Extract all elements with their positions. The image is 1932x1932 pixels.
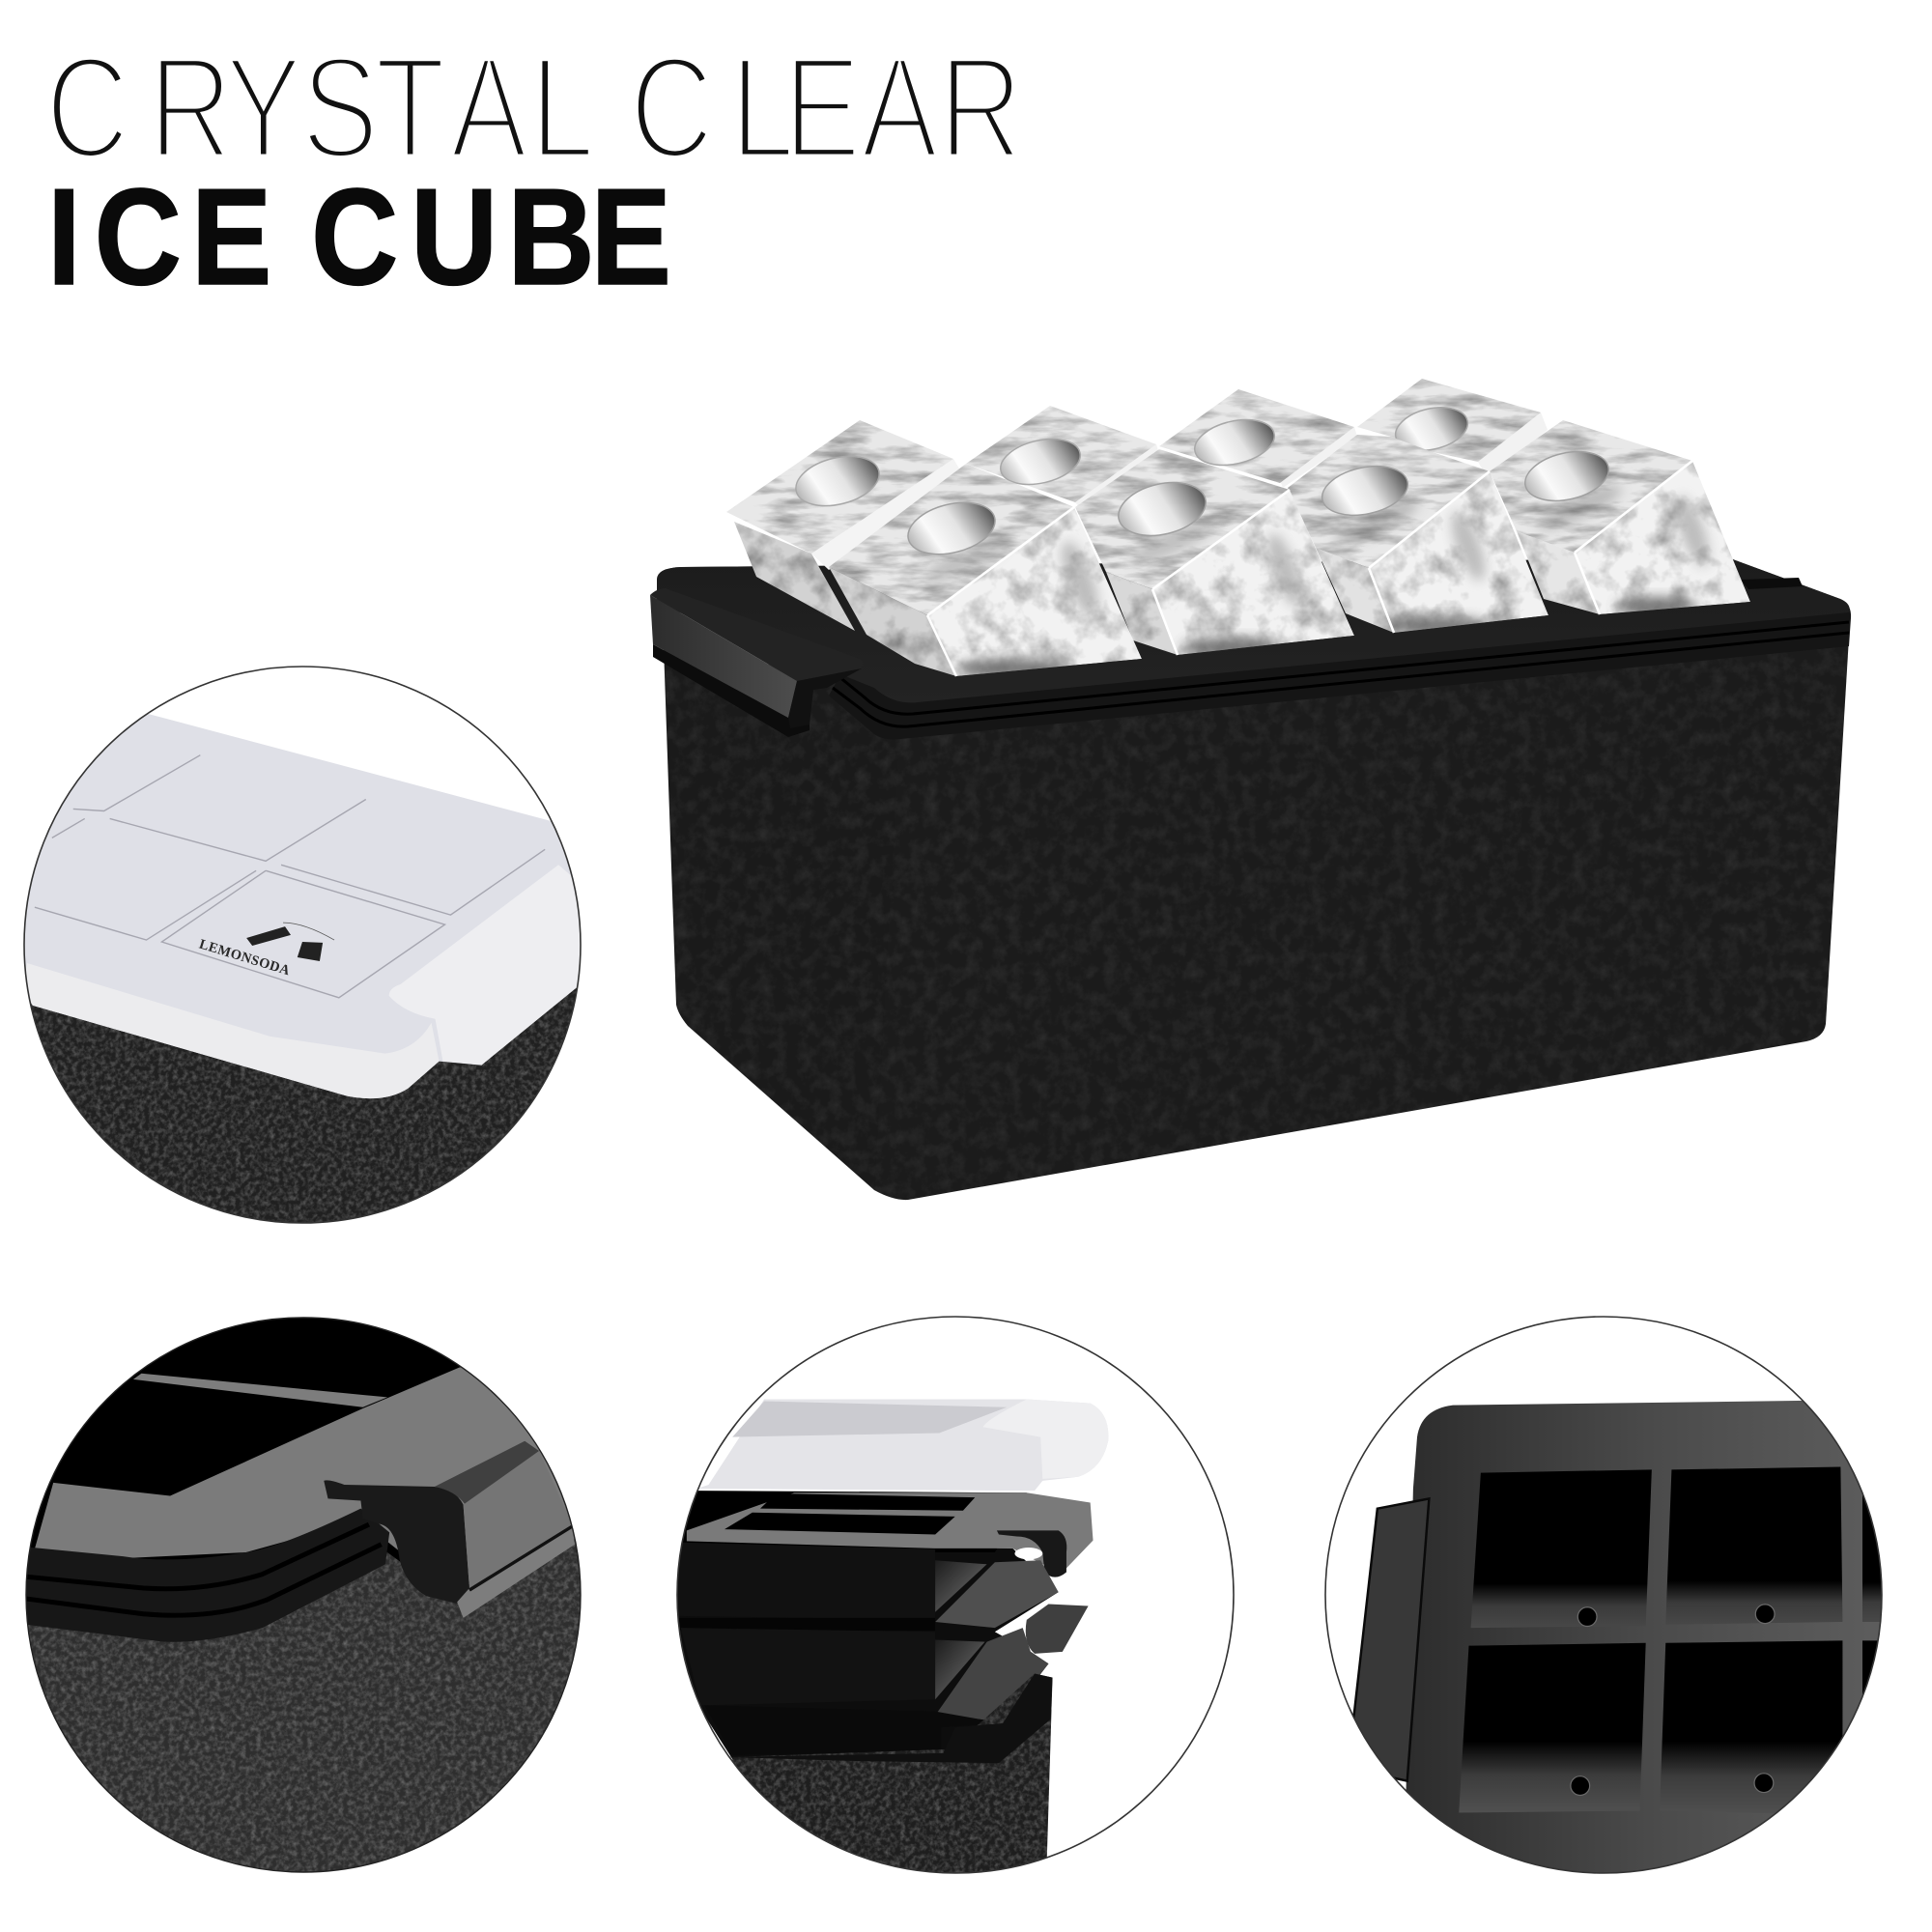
white lid on top xyxy=(696,1399,1108,1491)
panel: lid clip detail xyxy=(20,1314,599,1890)
handle end xyxy=(788,668,862,728)
middle tray gray side xyxy=(935,1628,1048,1721)
side handle xyxy=(1353,1498,1429,1781)
cell bottom right xyxy=(1660,1640,1842,1815)
clip handle lip xyxy=(457,1524,575,1618)
ice cubes xyxy=(726,379,1750,678)
clip handle dark end xyxy=(324,1480,469,1604)
cell far right lower xyxy=(1862,1640,1910,1815)
lid handle xyxy=(389,865,585,1065)
logo icon xyxy=(246,923,334,961)
black rim xyxy=(20,1509,389,1642)
rim grooves xyxy=(20,1524,382,1615)
ice cube front 2 xyxy=(1075,449,1354,657)
top tray hook xyxy=(997,1530,1066,1577)
clip handle front xyxy=(464,1451,572,1588)
main product: ice tray box xyxy=(650,379,1851,1200)
panel: stacked trays detail xyxy=(677,1317,1234,1878)
tray divider xyxy=(677,1618,935,1631)
small right handle xyxy=(1741,578,1803,589)
top tray body xyxy=(677,1543,935,1620)
ice cube back 1 xyxy=(726,420,959,631)
black tray opening xyxy=(31,1318,491,1588)
middle tray sloped wedge xyxy=(935,1640,985,1699)
title line: ice cube: ICE CUBE xyxy=(47,161,671,314)
ice cube front 1 xyxy=(829,464,1142,678)
top tray sloped wedge xyxy=(935,1560,987,1612)
lid front band xyxy=(23,963,440,1098)
top tray gray surface xyxy=(687,1492,1094,1568)
handle top face xyxy=(650,588,864,681)
clip lip shadow line xyxy=(469,1526,572,1590)
ice cube back 2 xyxy=(966,406,1159,510)
foam wall xyxy=(20,1536,594,1890)
tray frame xyxy=(1404,1399,1910,1910)
title line: crystal clear: CRYSTAL CLEAR xyxy=(45,26,1023,188)
foam base xyxy=(31,987,577,1223)
logo text: LEMONSODA xyxy=(197,937,292,979)
clip handle bevel xyxy=(435,1441,539,1505)
bottom tray body xyxy=(704,1705,1003,1755)
stack dark base xyxy=(677,1543,1059,1759)
handle front face xyxy=(650,595,797,718)
title xyxy=(45,26,1023,314)
panel: tray underside detail xyxy=(1325,1317,1910,1910)
gray divider strip xyxy=(133,1374,387,1407)
top tray gray side xyxy=(935,1560,1059,1628)
circle outline xyxy=(26,1318,581,1872)
cell bottom left xyxy=(1459,1643,1646,1813)
ice cube back 4 xyxy=(1357,379,1548,478)
box left face xyxy=(664,647,898,1190)
circle outline xyxy=(1325,1317,1882,1873)
handle lower lip xyxy=(653,644,810,737)
lid groove lower xyxy=(833,633,1849,726)
ice cube front 4 xyxy=(1490,420,1750,616)
lid top surface xyxy=(657,558,1850,702)
middle tray body xyxy=(681,1628,935,1705)
left handle xyxy=(650,588,864,737)
lid rim xyxy=(657,558,1851,739)
ice cube front 3 xyxy=(1288,435,1548,636)
cell top left xyxy=(1471,1469,1652,1628)
lid groove upper xyxy=(838,622,1849,714)
ice cube back 3 xyxy=(1159,389,1357,488)
lower hook tab xyxy=(1026,1604,1089,1654)
circle outline xyxy=(24,667,581,1223)
lid gap highlight xyxy=(1014,1548,1042,1559)
panel: white lid detail xyxy=(19,667,589,1235)
foam corner xyxy=(732,1673,1053,1878)
tray lid xyxy=(657,558,1851,739)
top tray openings xyxy=(689,1493,975,1534)
cell top right xyxy=(1665,1466,1842,1625)
foam rim shadow xyxy=(724,1673,1053,1763)
lid cell lines xyxy=(35,755,545,998)
box front face xyxy=(874,638,1849,1200)
foam box body xyxy=(664,638,1849,1200)
top tray black interior xyxy=(677,1491,1027,1552)
white lid handle xyxy=(983,1399,1108,1479)
circle outline right arc xyxy=(677,1317,1234,1873)
gray lid surface xyxy=(35,1368,574,1584)
drain holes xyxy=(1571,1605,1775,1795)
cell far right upper xyxy=(1862,1481,1910,1622)
white lid recess strip xyxy=(732,1402,1007,1437)
white lid surface xyxy=(25,714,577,1099)
